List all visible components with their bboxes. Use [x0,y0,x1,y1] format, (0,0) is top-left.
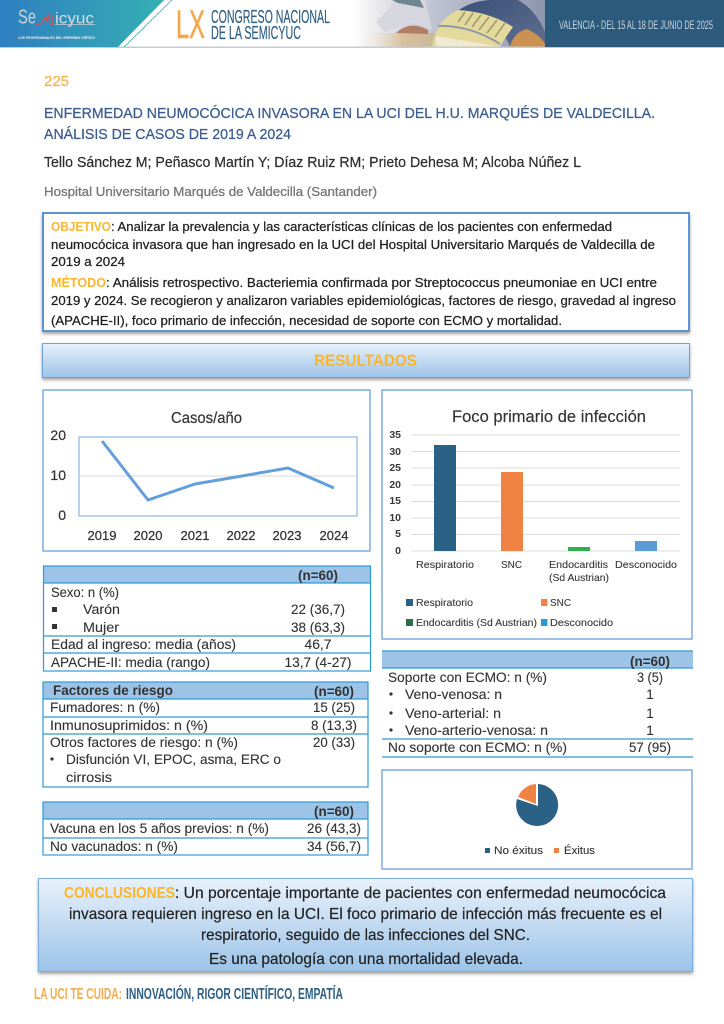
header banner [0,0,724,48]
congress title: LX [176,3,205,47]
bar chart: foco primario de infección: 10 [389,512,401,524]
bar chart: foco primario de infección: Respiratorio [416,559,474,571]
panel: conclusiones: CONCLUSIONES [64,885,175,902]
table: factores de riesgo: Disfunción VI, EPOC, asma, ERC o [66,752,281,767]
table: soporte ECMO: (n=60) [630,654,670,669]
panel: objetivo y método: neumocócica invasora que han ingresado en la UCI del Hospital Universitario Marqués de Valdecilla de [51,237,655,252]
pie chart: mortalidad: No éxitus [494,845,544,857]
panel: objetivo y método: OBJETIVO [51,219,111,234]
table: factores de riesgo: cirrosis [66,770,112,785]
congress title [176,3,330,47]
pie chart: mortalidad: Éxitus [564,844,596,857]
header photo: Valencia architecture [353,0,545,46]
table: vacunación: 34 (56,7) [307,839,361,854]
chart legend: Respiratorio [416,597,473,609]
table: factores de riesgo [43,682,368,787]
bar chart: foco primario de infección: 30 [389,446,401,458]
panel: conclusiones [38,878,692,972]
title: ENFERMEDAD NEUMOCÓCICA INVASORA EN LA UCI DEL H.U. MARQUÉS DE VALDECILLA. [44,105,655,122]
heading: resultados [42,344,690,378]
bar chart: foco primario de infección: Desconocido [615,559,677,571]
line chart: casos/año: 2021 [181,528,209,543]
line chart: casos/año: 2019 [88,528,116,543]
table: vacunación: 26 (43,3) [307,821,361,836]
line chart: casos/año: Casos/año [171,410,242,427]
table: soporte ECMO: 1 [646,723,654,738]
table: demografía: 22 (36,7) [291,602,345,617]
table: demografía: Edad al ingreso: media (años) [51,637,236,652]
table: demografía: 46,7 [304,637,332,652]
bar chart: foco primario de infección: Endocarditis [549,559,608,571]
chart legend [406,597,613,629]
bar chart: foco primario de infección: SNC [501,559,522,571]
table: factores de riesgo: (n=60) [314,684,354,699]
chart legend: Endocarditis (Sd Austrian) [416,617,537,629]
table: demografía: 13,7 (4-27) [284,655,352,670]
panel: conclusiones: Es una patología con una mortalidad elevada. [209,951,523,968]
bar chart: foco primario de infección: 20 [389,479,401,491]
authors: Tello Sánchez M; Peñasco Martín Y; Díaz Ruiz RM; Prieto Dehesa M; Alcoba Núñez L [44,154,581,171]
table: demografía: 38 (63,3) [291,620,345,635]
table: demografía: Sexo: n (%) [51,585,119,600]
logo block: Semicyuc [0,0,172,47]
logo block: Semicyuc: Se [18,6,36,28]
line chart: casos/año [43,390,370,551]
table: vacunación [43,802,368,855]
pie chart: mortalidad [382,770,692,869]
table: factores de riesgo: Fumadores: n (%) [50,700,160,715]
table: vacunación: Vacuna en los 5 años previos: n (%) [50,821,269,836]
table: soporte ECMO: 1 [646,687,654,702]
line chart: casos/año: 0 [58,507,66,523]
bar chart: foco primario de infección: Foco primario de infección [452,408,646,426]
table: vacunación: No vacunados: n (%) [50,839,178,854]
line chart: casos/año: 2022 [227,528,255,543]
table: factores de riesgo: 20 (33) [313,735,355,750]
table: soporte ECMO: 3 (5) [637,670,663,685]
chart legend: Desconocido [550,617,613,629]
date panel [545,0,724,47]
panel: conclusiones: : Un porcentaje importante de pacientes con enfermedad neumocócica [175,885,666,902]
panel: conclusiones: respiratorio, seguido de las infecciones del SNC. [201,927,530,944]
bar chart: foco primario de infección [382,390,692,639]
panel: conclusiones: invasora requieren ingreso en la UCI. El foco primario de infección más frecuente es el [69,906,662,923]
bar chart: foco primario de infección: (Sd Austrian) [549,572,609,584]
table: soporte ECMO [382,651,693,757]
table: demografía: APACHE-II: media (rango) [51,655,210,670]
panel: objetivo y método: : Analizar la prevalencia y las características clínicas de los pacientes con enfermedad [111,219,612,234]
footer slogan: LA UCI TE CUIDA: [34,986,122,1003]
line chart: casos/año: 2023 [273,528,301,543]
congress title: DE LA SEMICYUC [211,23,301,43]
logo block: Semicyuc: LOS PROFESIONALES DEL ENFERMO CRÍTICO [18,35,95,40]
bar chart: foco primario de infección: 0 [395,545,401,557]
panel: objetivo y método [43,213,689,331]
table: soporte ECMO: 1 [646,706,654,721]
line chart: casos/año: 2020 [134,528,162,543]
table: soporte ECMO: No soporte con ECMO: n (%) [388,740,567,755]
panel: objetivo y método: : Análisis retrospectivo. Bacteriemia confirmada por Streptococcus pneumoniae en UCI entre [106,275,657,290]
footer slogan [34,985,343,1003]
table: demografía: Varón [83,602,120,617]
line chart: casos/año: 2024 [320,528,348,543]
title: ANÁLISIS DE CASOS DE 2019 A 2024 [44,126,291,143]
panel: objetivo y método: 2019 a 2024 [51,254,125,269]
table: factores de riesgo: 15 (25) [313,700,355,715]
bar chart: foco primario de infección: 35 [389,429,401,441]
chart legend: SNC [550,597,571,609]
title [44,105,655,143]
line chart: casos/año: 20 [50,427,66,443]
table: factores de riesgo: Otros factores de riesgo: n (%) [50,735,238,750]
bar chart: foco primario de infección: 25 [389,462,401,474]
panel: objetivo y método: MÉTODO [51,275,106,290]
table: factores de riesgo: Factores de riesgo [53,683,173,698]
line chart: casos/año: 10 [50,467,66,483]
table: soporte ECMO: Veno-arterial: n [405,706,501,721]
heading: resultados: RESULTADOS [314,352,417,370]
table: soporte ECMO: Veno-venosa: n [405,687,502,702]
table: demografía [43,566,371,671]
table: soporte ECMO: 57 (95) [629,740,671,755]
bar chart: foco primario de infección: 5 [395,528,401,540]
table: soporte ECMO: Soporte con ECMO: n (%) [388,670,547,685]
bar chart: foco primario de infección: 15 [389,495,401,507]
logo block: Semicyuc: icyuc [55,10,94,28]
affiliation: Hospital Universitario Marqués de Valdecilla (Santander) [44,184,377,199]
congress title: CONGRESO NACIONAL [211,7,330,27]
table: demografía: (n=60) [298,568,338,583]
abstract number: 225 [44,74,69,90]
panel: objetivo y método: (APACHE-II), foco primario de infección, necesidad de soporte con ECMO y mortalidad. [51,313,562,328]
table: factores de riesgo: Inmunosuprimidos: n (%) [50,718,208,733]
table: soporte ECMO: Veno-arterio-venosa: n [405,723,548,738]
table: factores de riesgo: 8 (13,3) [311,718,357,733]
panel: objetivo y método: 2019 y 2024. Se recogieron y analizaron variables epidemiológicas, factores de riesgo, gravedad al ingreso [51,293,676,308]
table: demografía: Mujer [83,620,120,635]
footer slogan: INNOVACIÓN, RIGOR CIENTÍFICO, EMPATÍA [126,985,343,1003]
table: vacunación: (n=60) [314,804,354,819]
